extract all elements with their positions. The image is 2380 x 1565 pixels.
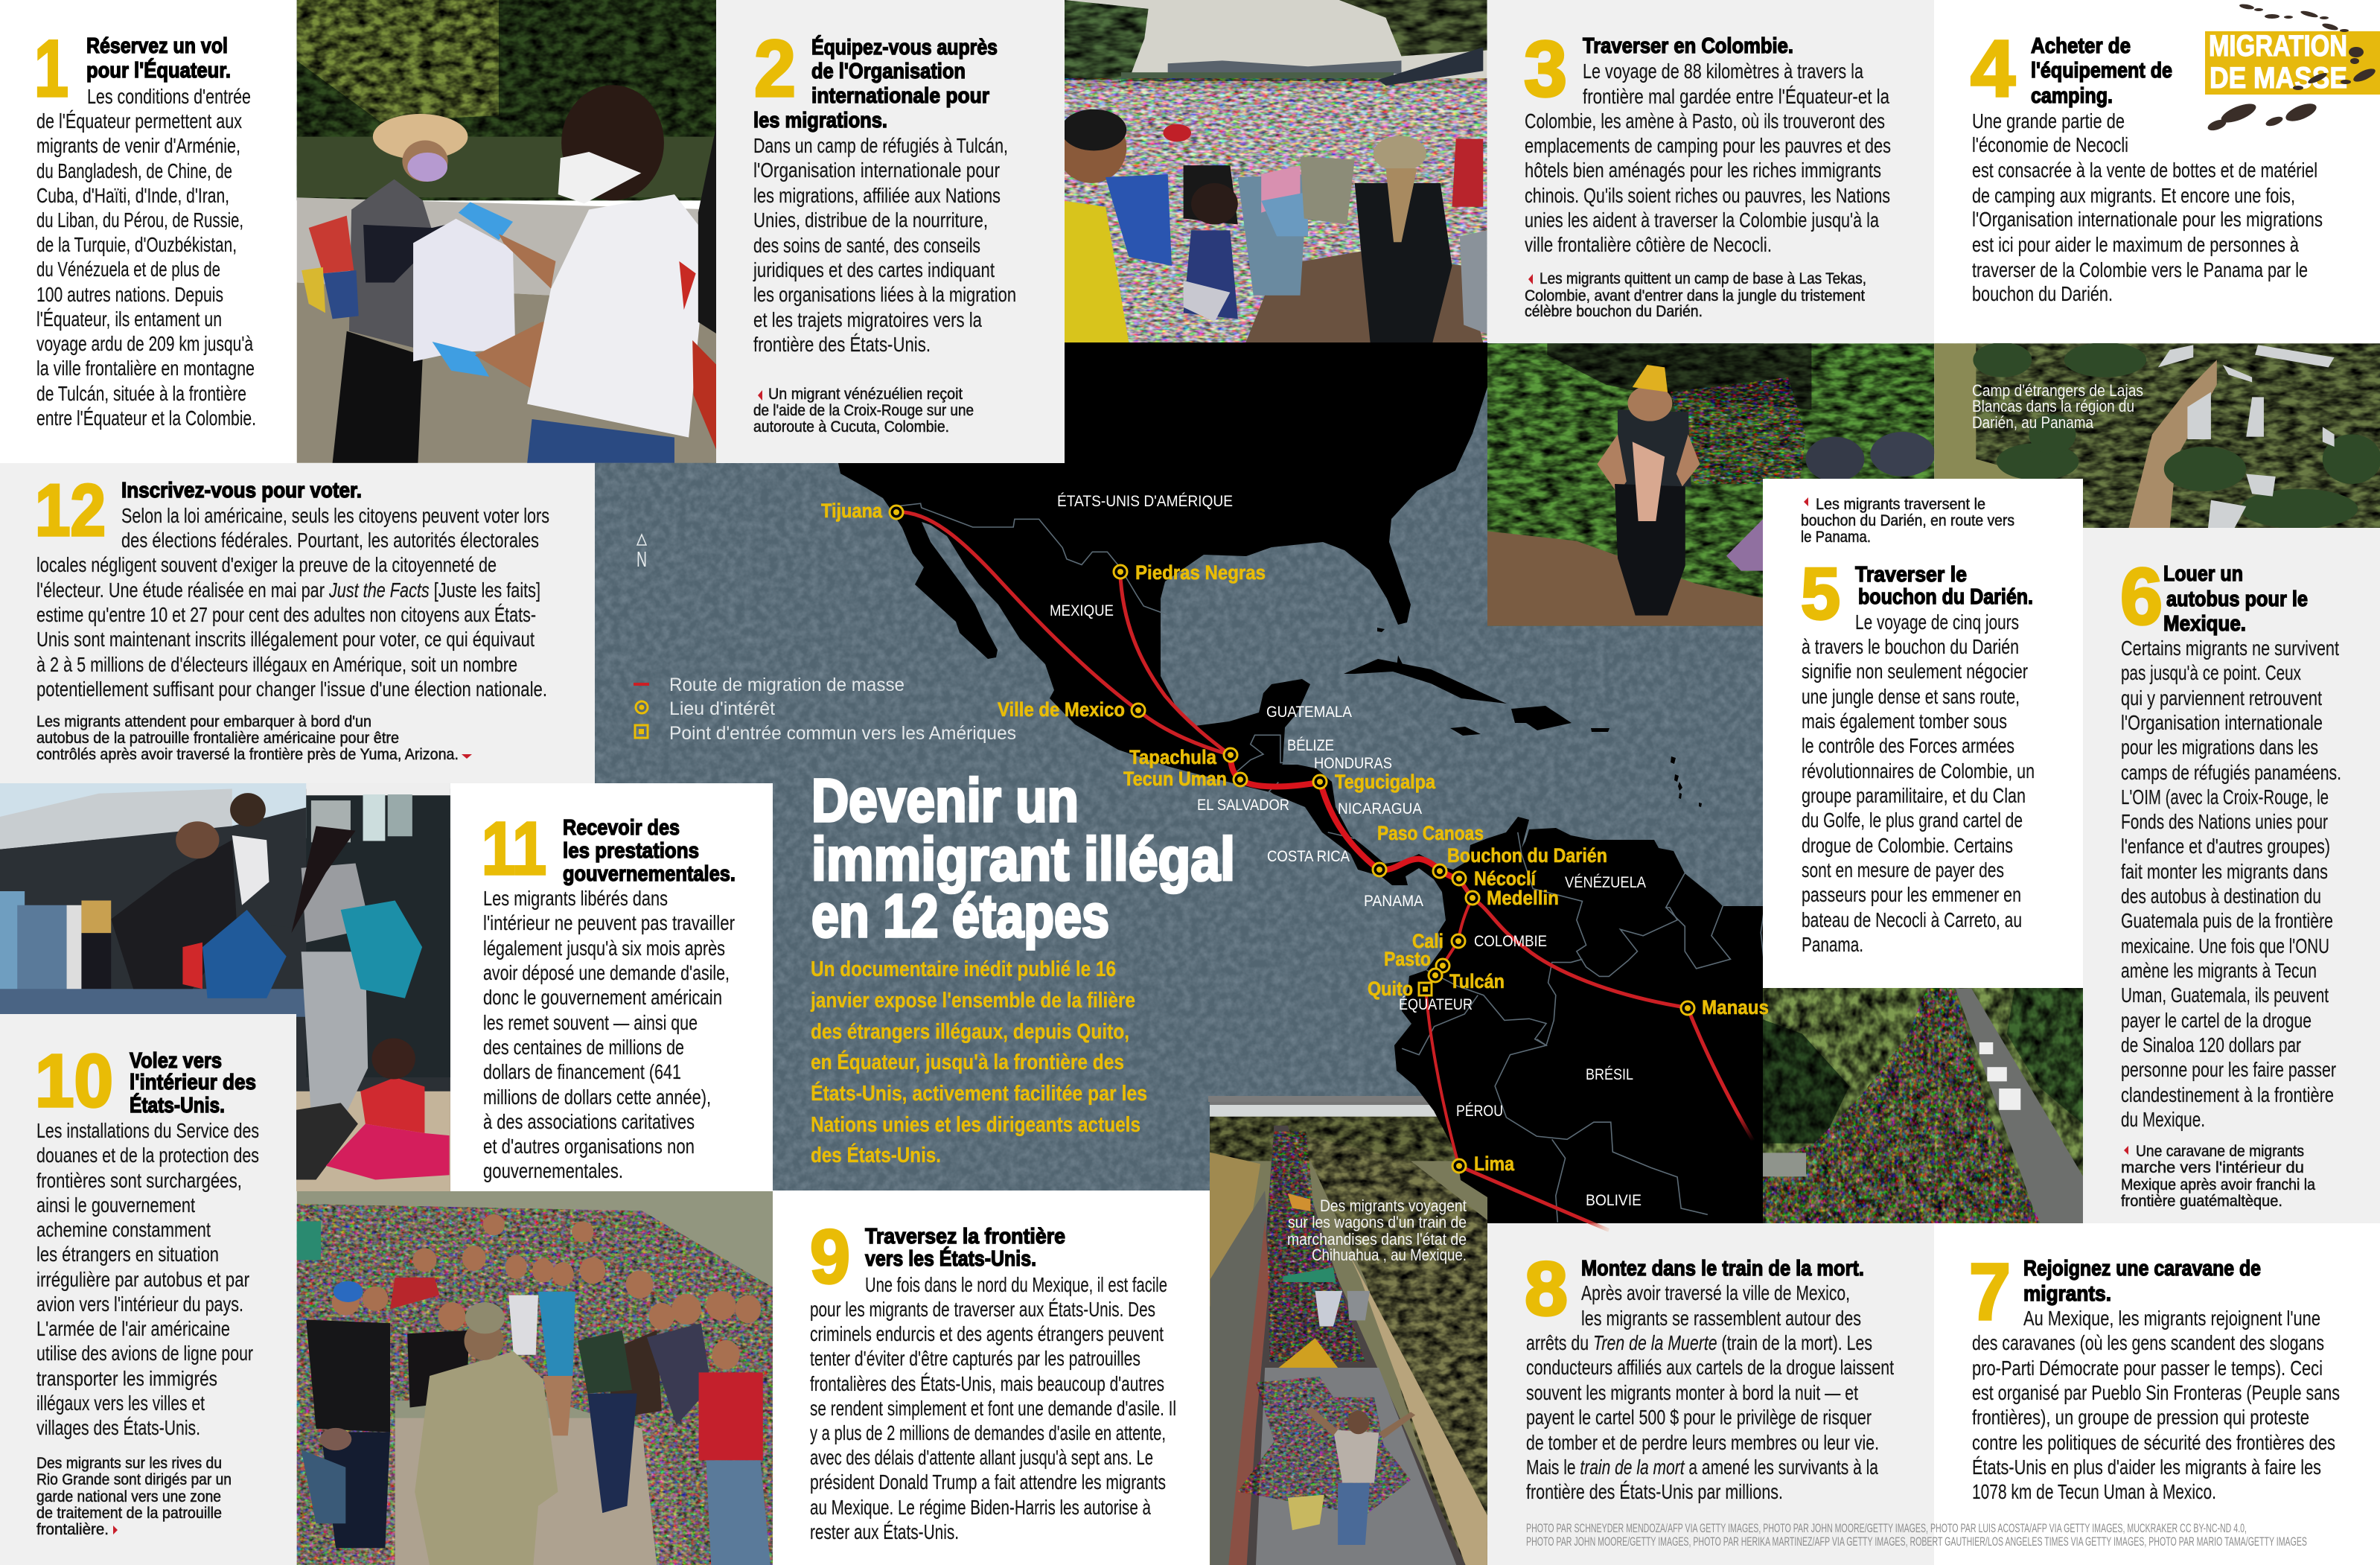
heading 11: les prestations: [563, 839, 699, 863]
number 11: 11: [482, 807, 546, 890]
body 1: [36, 85, 256, 430]
subtitle: janvier expose l'ensemble de la filière: [810, 989, 1135, 1013]
caption 3 with red marker: Les migrants quittent un camp de base à Las Tekas,: [1540, 270, 1866, 287]
body 10: ainsi le gouvernement: [36, 1193, 195, 1217]
body 3: Le voyage de 88 kilomètres à travers la: [1583, 60, 1863, 83]
heading 2: [753, 34, 998, 133]
body 1: de l'Équateur permettent aux: [36, 109, 242, 133]
heading 4: Acheter de: [2031, 34, 2131, 58]
caption 3 with red marker: Colombie, avant d'entrer dans la jungle du tristement: [1525, 287, 1865, 305]
panel 6: rent a bus to Mexico: [2083, 528, 2380, 1223]
body 2: frontière des États-Unis.: [753, 333, 931, 356]
body 11: gouvernementales.: [483, 1159, 623, 1182]
heading 9: vers les États-Unis.: [865, 1246, 1036, 1271]
map: place labels: Manaus: [1702, 996, 1769, 1019]
panel 5: cross the Darién Gap: [1763, 479, 2083, 988]
panel 8: board the death train: [1487, 1223, 1934, 1565]
body 5: signifie non seulement négocier: [1802, 660, 2028, 683]
body 12: l'électeur. Une étude réalisée en mai par Just the Facts [Juste les faits]: [36, 578, 540, 602]
photo caption: camp: Darién, au Panama: [1972, 413, 2094, 432]
body 11: avoir déposé une demande d'asile,: [483, 961, 730, 984]
body 3: hôtels bien aménagés pour les riches immigrants: [1525, 159, 1881, 182]
number 6: 6: [2120, 551, 2163, 641]
body 2: les migrations, affiliée aux Nations: [753, 184, 1001, 207]
logo: Migration de masse with footprints: DE MASSE: [2210, 62, 2347, 95]
body 5: [1802, 611, 2035, 956]
body 5: sont en mesure de payer des: [1802, 858, 2004, 882]
icon: boot footprints: [2207, 3, 2377, 133]
map: country labels: BRÉSIL: [1586, 1066, 1633, 1083]
map: country labels: [1050, 493, 1646, 1209]
body 4: bouchon du Darién.: [1972, 282, 2113, 305]
body 2: et les trajets migratoires vers la: [753, 308, 982, 331]
photo: crowd of migrants leaving base camp: [1056, 0, 1487, 342]
photo caption: train: [1287, 1196, 1467, 1264]
map: place labels: Tapachula: [1129, 746, 1217, 768]
photo: migrants boarding Border Patrol bus: [0, 782, 450, 1201]
caption 5 with red marker: [1801, 496, 2014, 546]
map: country labels: COLOMBIE: [1474, 933, 1547, 950]
caption 12 with red marker: contrôlés après avoir traversé la frontière près de Yuma, Arizona.: [36, 746, 459, 763]
body 10: avion vers l'intérieur du pays.: [36, 1293, 243, 1316]
body 3: chinois. Qu'ils soient riches ou pauvres, les Nations: [1525, 184, 1890, 207]
body 8: conducteurs affiliés aux cartels de la drogue laissent: [1526, 1356, 1894, 1379]
map: country labels: COSTA RICA: [1267, 848, 1350, 865]
number 2: 2: [754, 23, 796, 113]
body 11: dollars de financement (641: [483, 1060, 681, 1083]
body 10: irrégulière par autobus et par: [36, 1268, 249, 1291]
body 5: Le voyage de cinq jours: [1855, 611, 2019, 634]
map: place labels: Tecun Uman: [1123, 768, 1227, 790]
body 1: Les conditions d'entrée: [87, 85, 251, 108]
number 10: 10: [35, 1039, 113, 1123]
body 10: frontières sont surchargées,: [36, 1169, 242, 1192]
heading 10: l'intérieur des: [130, 1071, 256, 1094]
heading 2: Équipez-vous auprès: [811, 34, 998, 60]
heading 2: internationale pour: [811, 84, 989, 108]
subtitle: [810, 957, 1147, 1167]
main title: immigrant illégal: [811, 826, 1235, 893]
body 2: des soins de santé, des conseils: [753, 234, 980, 257]
grey strip above train photo: [1208, 1096, 1469, 1102]
body 10: [36, 1119, 259, 1439]
caption 12 with red marker: Les migrants attendent pour embarquer à bord d'un: [36, 713, 371, 730]
heading 9: [865, 1225, 1065, 1271]
body 9: Une fois dans le nord du Mexique, il est facile: [865, 1273, 1167, 1296]
panel 4: buy camping gear: [1934, 0, 2380, 343]
body 6: payer le cartel de la drogue: [2121, 1009, 2312, 1032]
body 12: locales négligent souvent d'exiger la preuve de la citoyenneté de: [36, 553, 497, 576]
photo: Lajas Blancas camp aerial view: [1934, 342, 2380, 529]
photo: Red Cross aid handed to migrant: [297, 0, 717, 463]
legend: route: Route de migration de masse: [669, 675, 905, 695]
body 6: du Mexique.: [2121, 1108, 2205, 1131]
heading 5: bouchon du Darién.: [1858, 585, 2033, 609]
map: place labels: Ville de Mexico: [998, 698, 1125, 721]
body 3: ville frontalière côtière de Necocli.: [1525, 233, 1772, 256]
map: place labels: Medellin: [1487, 887, 1559, 909]
map background: water: [595, 342, 1764, 1223]
map: place labels: Piedras Negras: [1135, 561, 1266, 584]
main title: Devenir un: [811, 767, 1079, 835]
caption 6 with red marker: Une caravane de migrants: [2136, 1143, 2304, 1160]
body 8: payent le cartel 500 $ pour le privilège de risquer: [1526, 1406, 1872, 1429]
caption 5 with red marker: bouchon du Darién, en route vers: [1801, 512, 2014, 529]
photo: man carrying baby through the Darién: [1487, 343, 1935, 626]
heading 7: Rejoignez une caravane de: [2023, 1257, 2261, 1281]
map: country borders: [896, 503, 1764, 1223]
map: country labels: MEXIQUE: [1050, 602, 1114, 619]
body 9: rester aux États-Unis.: [810, 1520, 959, 1543]
caption 5 with red marker: Les migrants traversent le: [1816, 496, 1985, 513]
number 5: 5: [1801, 552, 1840, 634]
body 8: frontière des États-Unis par millions.: [1526, 1480, 1783, 1503]
body 8: arrêts du Tren de la Muerte (train de la mort). Les: [1526, 1331, 1872, 1354]
body 1: du Liban, du Pérou, de Russie,: [36, 208, 243, 232]
body 12: à 2 à 5 millions de d'électeurs illégaux en Amérique, soit un nombre: [36, 653, 517, 676]
caption 10 with red marker: de traitement de la patrouille: [36, 1505, 222, 1522]
body 2: les organisations liées à la migration: [753, 283, 1016, 306]
body 3: unies les aident à traverser la Colombie jusqu'à la: [1525, 208, 1879, 232]
body 8: [1526, 1281, 1894, 1503]
body 11: donc le gouvernement américain: [483, 986, 722, 1009]
caption 2 with red marker: Un migrant vénézuélien reçoit: [768, 386, 963, 403]
subtitle: États-Unis, activement facilitée par les: [811, 1080, 1147, 1106]
number 3: 3: [1524, 25, 1567, 113]
panel 10: fly to the interior: [0, 1014, 296, 1565]
body 8: souvent les migrants monter à bord la nuit — et: [1526, 1381, 1858, 1404]
body 8: Après avoir traversé la ville de Mexico,: [1581, 1281, 1850, 1304]
heading 7: migrants.: [2023, 1282, 2111, 1306]
body 1: migrants de venir d'Arménie,: [36, 134, 240, 157]
map: country labels: EL SALVADOR: [1197, 797, 1289, 814]
caption 10 with red marker: Des migrants sur les rives du: [36, 1455, 222, 1472]
body 6: qui y parviennent retrouvent: [2121, 686, 2322, 710]
photo caption: train: sur les wagons d'un train de: [1288, 1213, 1467, 1231]
body 12: estime qu'entre 10 et 27 pour cent des adultes non citoyens aux États-: [36, 603, 536, 626]
legend: place of interest: Lieu d'intérêt: [669, 698, 775, 719]
number 7: 7: [1969, 1246, 2011, 1336]
number 4: 4: [1971, 23, 2015, 113]
body 10: L'armée de l'air américaine: [36, 1317, 230, 1340]
map: place labels: Bouchon du Darién: [1447, 844, 1607, 867]
subtitle: des étrangers illégaux, depuis Quito,: [811, 1020, 1129, 1044]
logo: Migration de masse with footprints: MIGRATION: [2209, 30, 2347, 63]
body 3: [1525, 60, 1891, 256]
panel 1: book a flight: [0, 0, 296, 463]
north arrow: N: [637, 548, 647, 572]
body 12: [36, 504, 549, 701]
map: place markers: [890, 506, 1694, 1173]
body 5: du Golfe, le plus grand cartel de: [1802, 809, 2023, 832]
body 10: les étrangers en situation: [36, 1243, 219, 1266]
north arrow: [637, 535, 647, 572]
map: land masses: [838, 342, 1764, 1223]
map: place labels: Tulcán: [1449, 970, 1505, 992]
panel 2: equip yourself from IOM: [716, 0, 1065, 463]
map: place labels: Tijuana: [821, 500, 883, 522]
body 12: des élections fédérales. Pourtant, les autorités électorales: [121, 529, 539, 552]
heading 6: Louer un: [2163, 562, 2243, 586]
caption 6 with red marker: [2121, 1143, 2315, 1210]
body 9: tenter d'éviter d'être capturés par les patrouilles: [810, 1347, 1140, 1370]
photo: caravan on the highway: [1763, 987, 2083, 1223]
body 1: de Tulcán, située à la frontière: [36, 382, 246, 405]
caption 10 with red marker: frontalière.: [36, 1521, 109, 1538]
body 1: voyage ardu de 209 km jusqu'à: [36, 332, 253, 355]
map: country labels: VÉNÉZUELA: [1565, 874, 1646, 891]
map: place labels: Quito: [1368, 978, 1413, 1000]
body 1: l'Équateur, ils entament un: [36, 307, 222, 331]
body 12: Unis sont maintenant inscrits illégalement pour voter, ce qui équivaut: [36, 628, 535, 651]
photo caption: camp: [1972, 381, 2143, 432]
body 11: Les migrants libérés dans: [483, 887, 668, 910]
heading 6: Mexique.: [2163, 612, 2246, 636]
body 4: est ici pour aider le maximum de personnes à: [1972, 233, 2299, 256]
caption 10 with red marker: garde national vers une zone: [36, 1488, 221, 1505]
map: country labels: PÉROU: [1456, 1103, 1503, 1120]
body 4: [1972, 109, 2323, 305]
heading 2: les migrations.: [753, 109, 887, 133]
land: Cuba: [1344, 659, 1507, 704]
panel 7: join a caravan: [1934, 1223, 2380, 1565]
body 2: Dans un camp de réfugiés à Tulcán,: [753, 134, 1008, 157]
body 12: Selon la loi américaine, seuls les citoyens peuvent voter lors: [121, 504, 549, 527]
heading 10: États-Unis.: [130, 1092, 225, 1118]
caption 6 with red marker: Mexique après avoir franchi la: [2121, 1176, 2315, 1193]
map: country labels: HONDURAS: [1314, 755, 1392, 772]
caption 3 with red marker: célèbre bouchon du Darién.: [1525, 303, 1703, 320]
photo credits: [1526, 1522, 2307, 1549]
photo caption: train: marchandises dans l'état de: [1287, 1230, 1467, 1249]
caption 10 with red marker: [36, 1455, 232, 1538]
body 4: l'économie de Necocli: [1972, 133, 2128, 156]
body 11: [483, 887, 735, 1182]
body 6: [2121, 637, 2341, 1131]
photo: National Guard directing line of migrants: [297, 1191, 774, 1565]
heading 8: Montez dans le train de la mort.: [1581, 1257, 1864, 1281]
caption 5 with red marker: le Panama.: [1801, 529, 1871, 546]
number 1: 1: [34, 23, 68, 113]
caption 6 with red marker: marche vers l'intérieur du: [2121, 1159, 2304, 1176]
body 9: président Donald Trump a fait attendre les migrants: [810, 1470, 1166, 1494]
body 9: pour les migrants de traverser aux États-Unis. Des: [810, 1298, 1155, 1321]
map: thick and southern routes: [1231, 755, 1753, 1230]
body 5: passeurs pour les emmener en: [1802, 883, 2021, 906]
heading 4: camping.: [2031, 84, 2113, 108]
body 2: Unies, distribue de la nourriture,: [753, 208, 988, 232]
body 10: utilise des avions de ligne pour: [36, 1342, 253, 1365]
body 1: de la Turquie, d'Ouzbékistan,: [36, 233, 237, 256]
body 11: et d'autres organisations non: [483, 1135, 695, 1158]
map: country labels: ÉTATS-UNIS D'AMÉRIQUE: [1057, 493, 1233, 510]
photo caption: camp: Blancas dans la région du: [1972, 397, 2134, 415]
body 5: révolutionnaires de Colombie, un: [1802, 759, 2035, 782]
caption 6 with red marker: frontière guatémaltèque.: [2121, 1193, 2282, 1210]
caption 10 with red marker: Rio Grande sont dirigés par un: [36, 1471, 232, 1488]
photo: migrants on freight train roof: [1209, 1102, 1487, 1565]
body 10: Les installations du Service des: [36, 1119, 259, 1142]
body 7: 1078 km de Tecun Uman à Mexico.: [1972, 1480, 2216, 1503]
body 11: légalement jusqu'à six mois après: [483, 937, 725, 960]
body 6: l'Organisation internationale: [2121, 711, 2323, 734]
panel 12: register to vote: [0, 463, 595, 783]
map: place labels: Paso Canoas: [1377, 822, 1484, 844]
heading 11: [563, 816, 736, 886]
body 11: millions de dollars cette année),: [483, 1086, 711, 1109]
photo caption: camp: Camp d'étrangers de Lajas: [1972, 381, 2143, 400]
body 10: douanes et de la protection des: [36, 1144, 259, 1167]
body 5: drogue de Colombie. Certains: [1802, 834, 2013, 857]
heading 1: pour l'Équateur.: [86, 57, 231, 83]
legend: entry point: Point d'entrée commun vers les Amériques: [669, 723, 1016, 744]
body 9: frontalières des États-Unis, mais beaucoup d'autres: [810, 1372, 1164, 1395]
body 9: se rendent simplement et font une demande d'asile. Il: [810, 1397, 1176, 1420]
map: thin routes through Mexico: [896, 512, 1230, 755]
heading 6: autobus pour le: [2166, 587, 2308, 611]
body 1: la ville frontalière en montagne: [36, 357, 255, 380]
body 12: potentiellement suffisant pour changer l'issue d'une élection nationale.: [36, 678, 547, 701]
land: Jamaica, Puerto Rico and Antilles: [1377, 628, 1702, 807]
map legend: [634, 535, 1016, 744]
body 11: l'intérieur ne peuvent pas travailler: [483, 911, 735, 934]
body 3: Colombie, les amène à Pasto, où ils trouveront des: [1525, 109, 1885, 133]
caption 2 with red marker: [753, 386, 974, 436]
caption 2 with red marker: de l'aide de la Croix-Rouge sur une: [753, 402, 974, 419]
body 5: à travers le bouchon du Darién: [1802, 635, 2019, 658]
body 8: Mais le train de la mort a amené les survivants à la: [1526, 1456, 1878, 1479]
body 3: frontière mal gardée entre l'Équateur-et la: [1583, 85, 1889, 108]
body 10: achemine constamment: [36, 1218, 211, 1241]
caption 12 with red marker: [36, 713, 472, 763]
subtitle: des États-Unis.: [811, 1142, 941, 1167]
panel 11: receive government benefits: [450, 783, 773, 1191]
body 2: juridiques et des cartes indiquant: [753, 258, 995, 281]
map: country labels: GUATEMALA: [1266, 704, 1352, 721]
subtitle: en Équateur, jusqu'à la frontière des: [811, 1049, 1124, 1074]
body 1: du Bangladesh, de Chine, de: [36, 159, 232, 182]
number 8: 8: [1525, 1246, 1568, 1331]
body 11: des centaines de millions de: [483, 1036, 684, 1059]
map: country labels: NICARAGUA: [1338, 800, 1422, 817]
body 2: l'Organisation internationale pour: [753, 159, 1000, 182]
land: Hispaniola: [1511, 706, 1572, 730]
body 1: entre l'Équateur et la Colombie.: [36, 407, 256, 430]
body 11: à des associations caritatives: [483, 1110, 695, 1133]
logo: Migration de masse with footprints: [2205, 3, 2380, 133]
map: place labels: Cali: [1412, 930, 1443, 952]
heading 11: gouvernementales.: [563, 862, 736, 886]
body 6: de Sinaloa 120 dollars par: [2121, 1033, 2301, 1056]
heading 1: [86, 34, 231, 83]
map: country labels: ÉQUATEUR: [1399, 996, 1473, 1013]
map: country labels: PANAMA: [1364, 893, 1423, 910]
body 9: [810, 1273, 1176, 1543]
body 7: [1972, 1307, 2340, 1503]
body 9: y a plus de 2 millions de demandes d'asile en attente,: [810, 1421, 1166, 1444]
map: place labels: Nécoclí: [1474, 867, 1537, 890]
body 6: pour les migrations dans les: [2121, 736, 2318, 759]
map: place labels: Tegucigalpa: [1335, 771, 1436, 793]
body 6: amène les migrants à Tecun: [2121, 959, 2317, 982]
number 12: 12: [35, 469, 106, 551]
body 10: villages des États-Unis.: [36, 1416, 200, 1439]
heading 10: Volez vers: [130, 1049, 222, 1073]
photo caption: train: Chihuahua , au Mexique.: [1312, 1246, 1467, 1264]
body 11: les remet souvent — ainsi que: [483, 1011, 698, 1034]
map: place labels: Lima: [1474, 1153, 1515, 1175]
body 5: bateau de Necocli à Carreto, au: [1802, 908, 2022, 931]
heading 7: [2023, 1257, 2261, 1306]
panel 3: cross into Colombia: [1487, 0, 1934, 343]
main title: [811, 767, 1235, 950]
panel 9: cross the US border: [773, 1191, 1210, 1565]
body 9: criminels endurcis et des agents étrangers peuvent: [810, 1322, 1164, 1345]
land: the Americas: [838, 342, 1764, 1223]
body 9: avec des délais d'attente allant jusqu'à sept ans. Le: [810, 1446, 1153, 1469]
body 5: Panama.: [1802, 933, 1863, 956]
caption 2 with red marker: autoroute à Cucuta, Colombie.: [753, 418, 949, 436]
body 1: 100 autres nations. Depuis: [36, 283, 223, 306]
heading 5: Traverser le: [1855, 563, 1967, 587]
heading 1: Réservez un vol: [86, 34, 228, 58]
map: place labels: [821, 500, 1769, 1175]
body 5: mais également tomber sous: [1802, 710, 2007, 733]
body 4: de camping aux migrants. Et encore une fois,: [1972, 184, 2295, 207]
map: country labels: BOLIVIE: [1586, 1192, 1642, 1209]
subtitle: Nations unies et les dirigeants actuels: [811, 1113, 1140, 1137]
body 5: groupe paramilitaire, et du Clan: [1802, 784, 2026, 807]
main title: en 12 étapes: [811, 882, 1109, 950]
subtitle: Un documentaire inédit publié le 16: [811, 957, 1116, 981]
heading 11: Recevoir des: [563, 816, 680, 840]
body 10: illégaux vers les villes et: [36, 1392, 205, 1415]
body 2: [753, 134, 1016, 356]
body 5: le contrôle des Forces armées: [1802, 734, 2014, 757]
body 1: du Vénézuela et de plus de: [36, 258, 220, 281]
body 1: Cuba, d'Haïti, d'Inde, d'Iran,: [36, 184, 229, 207]
map: country labels: BÉLIZE: [1287, 737, 1334, 754]
heading 6: [2163, 562, 2308, 636]
heading 12: Inscrivez-vous pour voter.: [121, 479, 362, 503]
body 10: transporter les immigrés: [36, 1367, 217, 1390]
body 6: des autobus à destination du: [2121, 885, 2321, 908]
heading 10: [130, 1049, 256, 1118]
heading 3: Traverser en Colombie.: [1583, 34, 1793, 58]
body 8: les migrants se rassemblent autour des: [1581, 1307, 1861, 1330]
body 4: Une grande partie de: [1972, 109, 2125, 133]
number 9: 9: [810, 1214, 850, 1299]
body 6: pas jusqu'à ce point. Ceux: [2121, 661, 2301, 684]
heading 9: Traversez la frontière: [865, 1225, 1065, 1249]
body 9: au Mexique. Le régime Biden-Harris les autorise à: [810, 1496, 1151, 1519]
heading 5: [1855, 563, 2033, 609]
caption 12 with red marker: autobus de la patrouille frontalière américaine pour être: [36, 730, 399, 747]
caption 3 with red marker: [1525, 270, 1866, 320]
heading 4: l'équipement de: [2031, 59, 2172, 83]
body 8: de tomber et de perdre leurs membres ou leur vie.: [1526, 1431, 1879, 1454]
body 3: emplacements de camping pour les pauvres et des: [1525, 134, 1891, 157]
heading 4: [2031, 34, 2172, 108]
map: place labels: Pasto: [1384, 948, 1431, 970]
heading 2: de l'Organisation: [811, 60, 966, 83]
photo caption: train: Des migrants voyagent: [1320, 1196, 1467, 1215]
body 5: une jungle dense et sans route,: [1802, 685, 2020, 708]
